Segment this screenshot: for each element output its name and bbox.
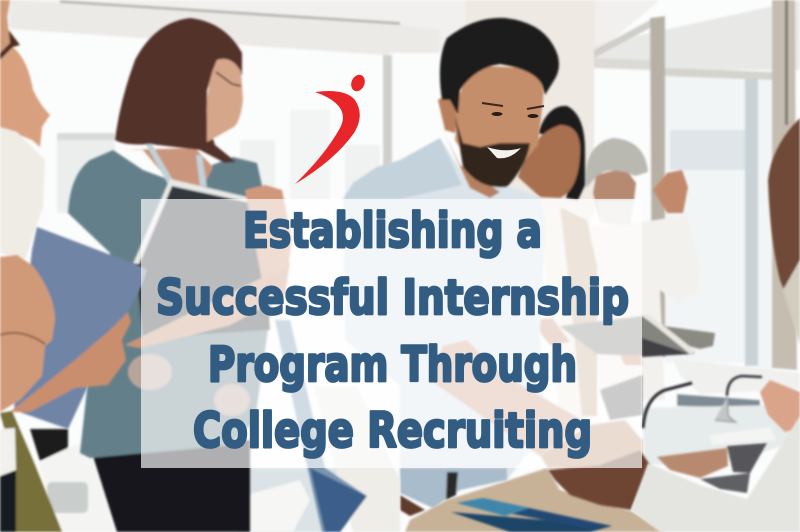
- central man: [343, 18, 587, 516]
- title: Program Through: [208, 337, 577, 393]
- handshake: [540, 420, 650, 510]
- translucent title panel: [141, 199, 642, 468]
- chair and bag: [30, 429, 310, 532]
- folder and hands at left: [0, 227, 147, 532]
- woman behind man: [518, 106, 597, 430]
- title: [156, 203, 629, 459]
- old woman with grey hair and raised hand: [586, 138, 700, 400]
- logo: red figure: [295, 73, 367, 184]
- lanyard document and blue badge: [275, 320, 400, 532]
- wooden table: [405, 468, 665, 532]
- woman with teal blouse: [68, 18, 292, 532]
- right-side seated people, sleeve and microphones: [631, 118, 800, 532]
- title: College Recruiting: [193, 403, 592, 459]
- brochures: [451, 498, 612, 532]
- title: Successful Internship: [156, 270, 629, 326]
- far-left people: [0, 0, 50, 260]
- folded books behind: [530, 315, 715, 420]
- title: Establishing a: [243, 203, 542, 259]
